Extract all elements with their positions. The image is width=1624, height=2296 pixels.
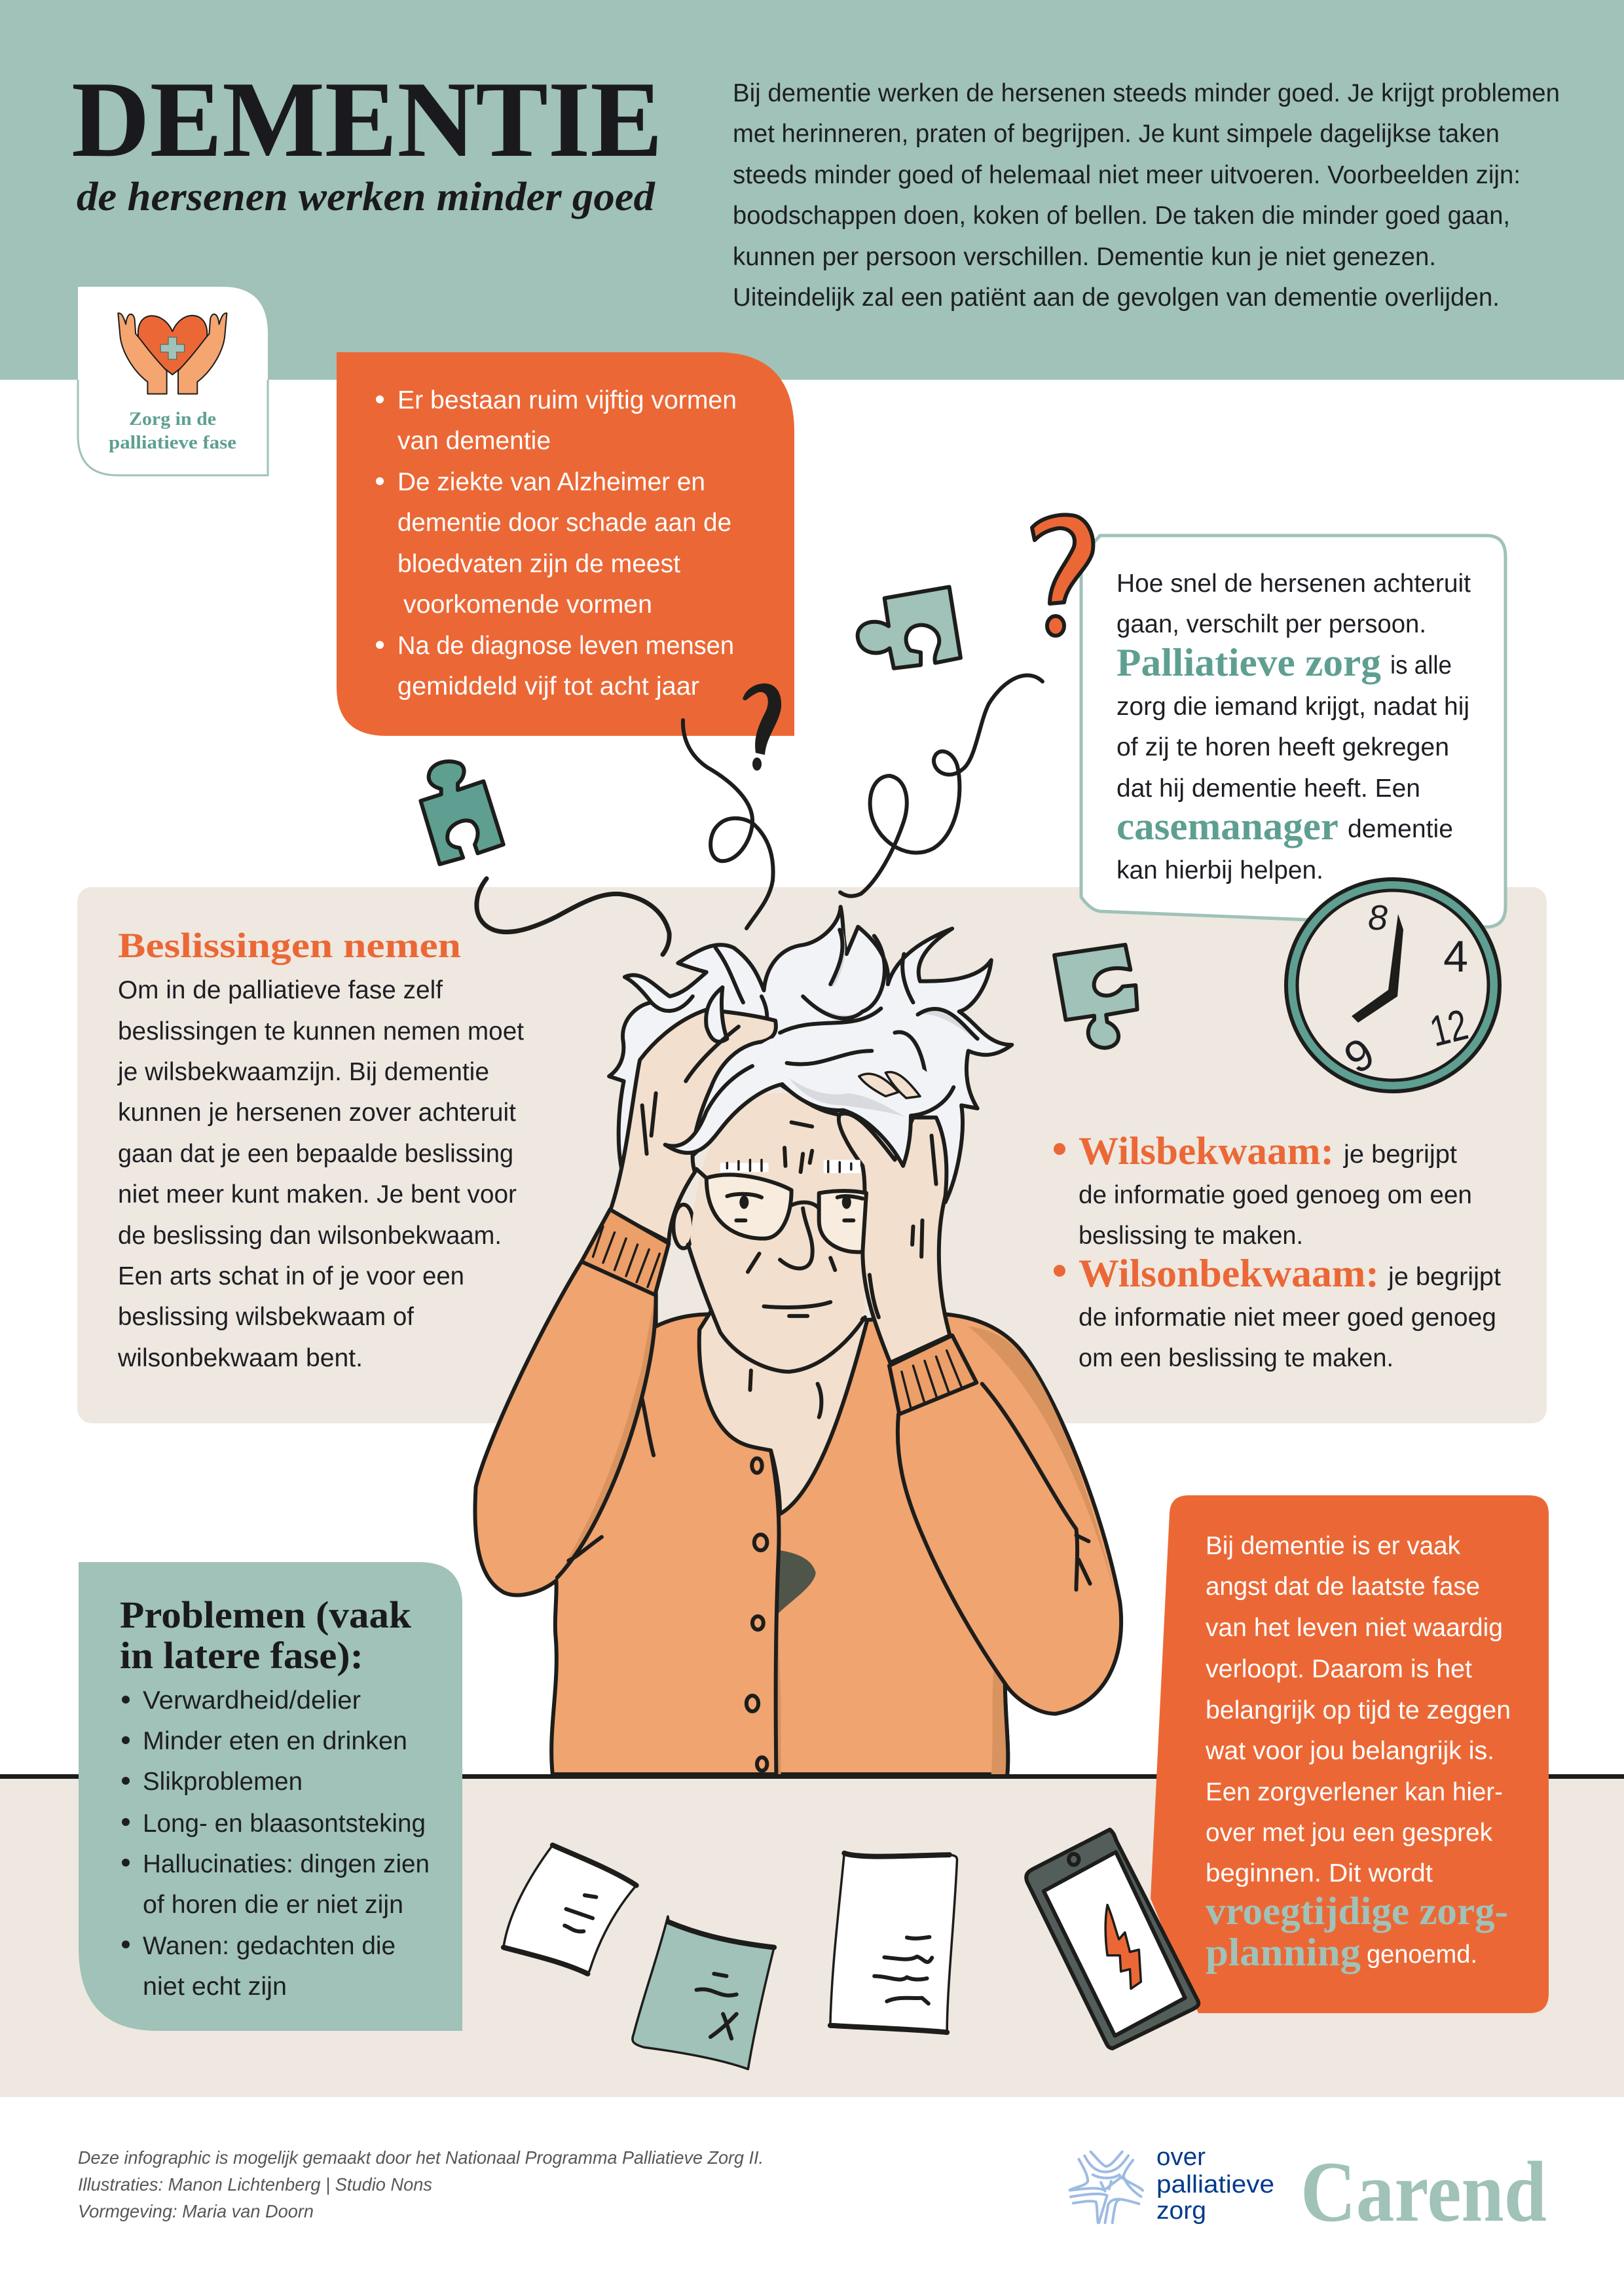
logo: over palliatieve zorg text [1156,2143,1274,2225]
icon: clock: 12 [1425,1000,1473,1055]
panel: decisions text: kunnen je hersenen zover achteruit [118,1099,516,1127]
panel: wilsbekwaam definitions: om een beslissing te maken. [1079,1344,1393,1372]
panel: forms of dementia: De ziekte van Alzheimer en [397,468,705,496]
neck and chest [699,1275,867,1514]
title: DEMENTIE [71,59,663,179]
panel: decisions text: wilsonbekwaam bent. [117,1344,363,1372]
panel: decisions background [77,887,1547,1423]
panel: wilsbekwaam definitions: beslissing te maken. [1079,1222,1303,1250]
hair lock over left hand [706,987,727,1042]
intro text block: Bij dementie werken de hersenen steeds minder goed. Je krijgt problemen [733,79,1560,107]
panel: problems: in latere fase): [120,1634,363,1677]
panel: problems [79,1562,462,2031]
panel: decisions text: Beslissingen nemen [118,926,461,965]
icon: clock: 9 [1336,1028,1383,1084]
logo: over palliatieve zorg text: over [1156,2143,1206,2171]
panel: bottom table band [0,1777,1624,2097]
panel: wilsbekwaam definitions: Wilsonbekwaam: [1079,1252,1379,1295]
intro text block: steeds minder goed of helemaal niet meer uitvoeren. Voorbeelden zijn: [733,161,1521,189]
panel: decisions text: beslissingen te kunnen nemen moet [118,1017,524,1046]
squiggle left [477,879,669,955]
logo: over palliatieve zorg text: palliatieve [1156,2171,1274,2198]
panel: advance care planning: Een zorgverlener kan hier- [1206,1778,1503,1806]
icon: puzzle piece top [858,587,961,668]
panel: decisions text [117,926,524,1372]
footer credits [78,2147,764,2221]
icon: clock [1286,879,1500,1091]
panel: decisions text: gaan dat je een bepaalde beslissing [118,1140,513,1168]
panel: forms of dementia: dementie door schade aan de [397,509,731,537]
panel: advance care planning: Bij dementie is er vaak [1206,1532,1460,1560]
footer credits: Illustraties: Manon Lichtenberg | Studio Nons [78,2174,432,2195]
panel: advance care planning: beginnen. Dit wordt [1206,1859,1433,1887]
panel: wilsbekwaam definitions: je begrijpt [1343,1140,1457,1169]
icon: puzzle piece left [420,761,504,864]
panel: advance care planning: verloopt. Daarom is het [1206,1655,1472,1683]
cardigan lines and buttons [557,1296,1090,1774]
panel: advance care planning [1151,1495,1549,2013]
panel: palliative care speech bubble: casemanager [1116,805,1338,848]
hair [609,907,1012,1202]
papers and phone on the table [504,1830,1198,2069]
panel: forms of dementia: van dementie [397,427,551,455]
paper 3 [830,1853,957,2032]
icon: clock: 8 [1368,898,1388,938]
icon: heart in hands [118,313,227,394]
icon: clock: 4 [1443,932,1468,981]
panel: advance care planning: planning [1206,1931,1361,1974]
panel: advance care planning: angst dat de laatste fase [1206,1573,1480,1601]
panel: wilsbekwaam definitions: Wilsbekwaam: [1079,1129,1334,1173]
icon: puzzle piece right [1054,945,1137,1048]
logo: over palliatieve zorg star [1069,2152,1143,2223]
intro text block: met herinneren, praten of begrijpen. Je kunt simpele dagelijkse taken [733,120,1500,148]
panel: palliative care speech bubble: dat hij dementie heeft. Een [1116,774,1420,803]
logo caption: Zorg in de [129,409,216,429]
panel: advance care planning: vroegtijdige zorg- [1206,1889,1508,1933]
fingertips on hair [859,1072,920,1098]
intro text block: kunnen per persoon verschillen. Dementie kun je niet genezen. [733,243,1436,271]
logo card: zorg in de palliatieve fase [78,287,268,475]
eyes, eyebrows, nose and mouth [720,1122,862,1316]
right hand [839,1114,950,1362]
left hand [610,1010,776,1241]
panel: decisions text: Om in de palliatieve fase zelf [118,976,443,1004]
cardigan shadows [557,1296,655,1578]
panel: advance care planning: wat voor jou belangrijk is. [1205,1737,1494,1765]
panel: decisions text: niet meer kunt maken. Je bent voor [118,1180,517,1209]
header band [0,0,1624,380]
logo: Carend: Carend [1301,2143,1547,2240]
panel: forms of dementia: Na de diagnose leven mensen [397,632,734,660]
panel: palliative care speech bubble: dementie [1348,815,1453,843]
hair shadows and strands [652,927,978,1093]
icon: orange question mark [1032,515,1093,636]
panel: palliative care speech bubble: Palliatieve zorg [1116,641,1381,684]
icon: black question mark [743,683,781,771]
right cuff [889,1336,976,1414]
panel: advance care planning: belangrijk op tijd te zeggen [1206,1696,1511,1724]
panel: palliative care speech bubble: Hoe snel de hersenen achteruit [1116,570,1471,598]
panel: palliative care speech bubble [1081,536,1505,927]
glasses [696,1169,866,1252]
panel: wilsbekwaam definitions [1054,1129,1501,1372]
face [690,1093,865,1372]
panel: palliative care speech bubble: gaan, verschilt per persoon. [1116,610,1426,638]
table line [0,1774,1624,1779]
panel: forms of dementia: gemiddeld vijf tot acht jaar [397,672,699,701]
panel: wilsbekwaam definitions: de informatie niet meer goed genoeg [1079,1303,1496,1332]
squiggle right [840,676,1043,896]
ear [673,1205,693,1248]
panel: decisions text: beslissing wilsbekwaam of [118,1303,414,1331]
footer credits: Deze infographic is mogelijk gemaakt door het Nationaal Programma Palliatieve Zorg II. [78,2147,764,2168]
panel: forms of dementia [337,352,794,736]
panel: problems: Problemen (vaak [120,1594,412,1636]
intro text block: boodschappen doen, koken of bellen. De taken die minder goed gaan, [733,202,1510,230]
panel: advance care planning: genoemd. [1367,1941,1477,1969]
panel: palliative care speech bubble: is alle [1390,651,1452,680]
squiggle centre [683,720,773,928]
panel: wilsbekwaam definitions: je begrijpt [1388,1263,1501,1291]
left cuff [581,1209,669,1295]
subtitle: de hersenen werken minder goed [77,175,655,219]
panel: problems: niet echt zijn [143,1973,287,2001]
intro text block: Uiteindelijk zal een patiënt aan de gevolgen van dementie overlijden. [733,283,1500,312]
panel: problems: Verwardheid/delier [143,1686,361,1715]
panel: advance care planning: over met jou een gesprek [1206,1819,1492,1847]
hair fringe over hands [665,1035,953,1166]
panel: decisions text: Een arts schat in of je voor een [118,1262,464,1290]
logo card: zorg in de palliatieve fase: palliatieve fase [109,432,236,453]
panel: decisions text: de beslissing dan wilsonbekwaam. [118,1222,502,1250]
paper 1 [504,1845,637,1974]
panel: advance care planning: van het leven niet waardig [1206,1614,1503,1642]
panel: forms of dementia: voorkomende vormen [403,591,652,619]
panel: problems: of horen die er niet zijn [143,1891,403,1919]
footer credits: Vormgeving: Maria van Doorn [78,2201,314,2221]
person illustration [475,907,1121,1774]
panel: palliative care speech bubble: of zij te horen heeft gekregen [1116,733,1449,761]
cardigan [475,1262,1121,1774]
panel: decisions text: je wilsbekwaamzijn. Bij dementie [117,1058,489,1086]
logo: over palliatieve zorg text: zorg [1156,2197,1206,2225]
panel: palliative care speech bubble: zorg die iemand krijgt, nadat hij [1116,693,1469,721]
panel: wilsbekwaam definitions: de informatie goed genoeg om een [1079,1181,1472,1209]
phone [1026,1830,1198,2049]
panel: problems: Minder eten en drinken [143,1727,407,1755]
panel: problems: Wanen: gedachten die [143,1932,396,1960]
intro text block [733,79,1560,312]
panel: forms of dementia: Er bestaan ruim vijftig vormen [397,386,737,414]
panel: palliative care speech bubble: kan hierbij helpen. [1116,856,1323,884]
shirt patch [777,1550,816,1615]
paper 2 [633,1916,774,2069]
panel: forms of dementia: bloedvaten zijn de meest [397,550,680,578]
panel: problems: Slikproblemen [143,1768,303,1796]
panel: problems: Long- en blaasontsteking [143,1810,426,1838]
hand lines [642,1027,936,1317]
panel: problems: Hallucinaties: dingen zien [143,1850,430,1878]
